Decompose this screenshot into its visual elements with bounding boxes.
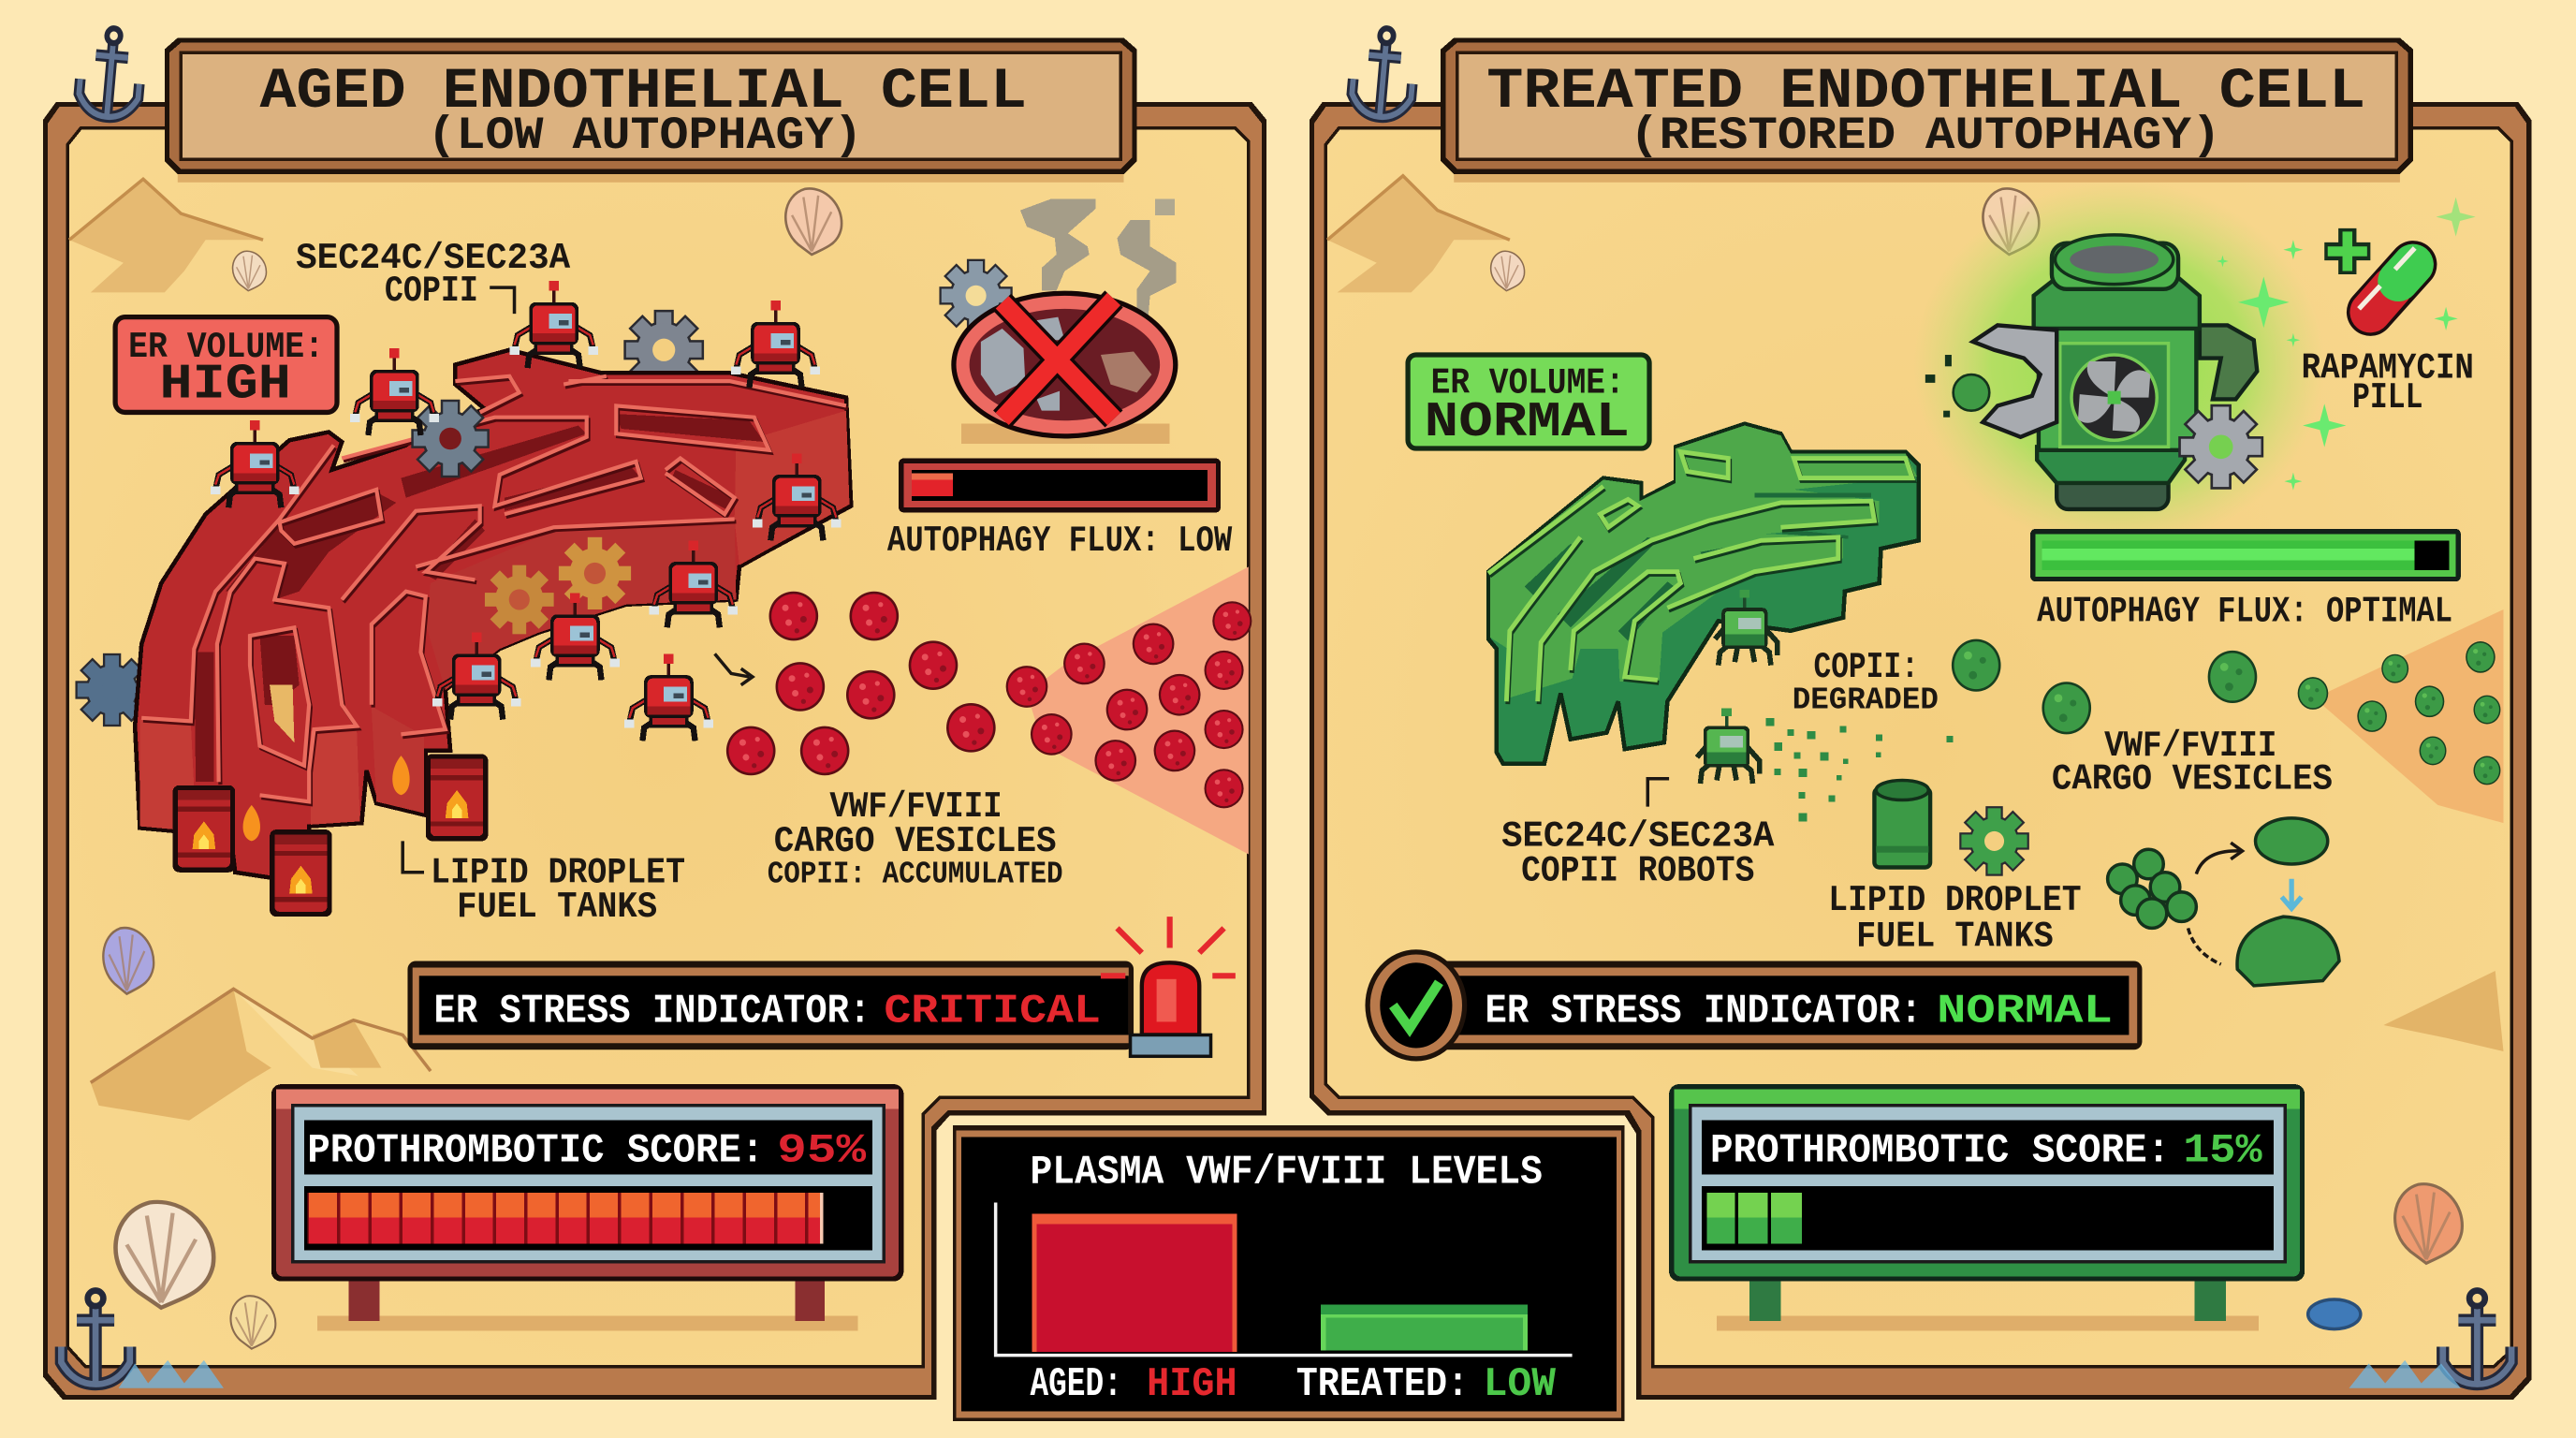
chart label: treated low: TREATED:: [1296, 1361, 1469, 1408]
score bar 95%: [307, 1193, 823, 1243]
ER walls: [139, 411, 849, 829]
bar: treated low: [1321, 1304, 1528, 1350]
label: ER volume normal: [1408, 355, 1649, 450]
anchor: bottom left: [61, 1291, 130, 1385]
icon: recycling cycle: [2108, 818, 2339, 986]
ER stress indicator: normal: ER STRESS INDICATOR:: [1486, 988, 1922, 1034]
ER structure: green: [1488, 424, 1919, 764]
header plaque: treated: (RESTORED AUTOPHAGY): [1630, 110, 2221, 162]
label: ER volume high: HIGH: [160, 357, 291, 413]
ER top surface: [1490, 425, 1917, 698]
label: autophagy flux low: AUTOPHAGY FLUX: LOW: [887, 521, 1233, 562]
flames on ER: [243, 756, 410, 841]
label: cargo vesicles: [768, 786, 1063, 892]
board legs treated: [1717, 1282, 2259, 1330]
label: COPII degraded: [1793, 647, 1939, 718]
panel: aged endothelial cell: [43, 26, 1266, 1400]
panel: plasma VWF/FVIII levels: [953, 1125, 1625, 1421]
label: lipid droplet fuel tanks: FUEL TANKS: [457, 887, 657, 928]
robots: green COPII intact: [1715, 590, 1778, 666]
panel frame: aged: [43, 102, 1266, 1400]
sand dune: lower right: [2383, 971, 2503, 1051]
label: green cargo vesicles: [2052, 726, 2333, 800]
label: rapamycin pill: RAPAMYCIN: [2302, 348, 2474, 389]
icon: green fuel tank: [1874, 780, 1930, 867]
label: lipid droplet fuel tanks: [402, 841, 685, 928]
icon: autophagy machine: [1925, 235, 2261, 509]
label: cargo vesicles: VWF/FVIII: [829, 786, 1003, 828]
board frame: [271, 1084, 903, 1282]
vesicles: green cargo: [1952, 639, 2500, 785]
label: SEC24C/SEC23A COPII robots: [1501, 779, 1775, 892]
icon: rapamycin pill: [2324, 228, 2415, 312]
label: SEC24C/SEC23A COPII: SEC24C/SEC23A: [296, 238, 571, 279]
ER lumen: [194, 414, 764, 782]
ER stress indicator: normal: [1365, 949, 2142, 1062]
prothrombotic score board: treated: [1669, 1084, 2305, 1330]
label: ER volume high: [115, 317, 337, 413]
ER stress indicator: critical: CRITICAL: [884, 988, 1101, 1034]
label: green lipid droplet: FUEL TANKS: [1856, 917, 2054, 958]
label: ER volume normal: NORMAL: [1425, 394, 1630, 450]
label: ER volume normal: ER VOLUME:: [1431, 362, 1625, 404]
ER stress indicator: critical: [407, 961, 1134, 1049]
label: green cargo vesicles: CARGO VESICLES: [2052, 758, 2333, 800]
label: rapamycin pill: PILL: [2352, 377, 2423, 418]
particles: degraded COPII: [1766, 718, 1954, 821]
gear: gray top: [626, 312, 702, 388]
label: rapamycin pill: [2302, 348, 2474, 418]
chart title: PLASMA VWF/FVIII LEVELS: [1031, 1149, 1543, 1196]
shell: small yellow: [230, 1296, 275, 1349]
label: SEC24C/SEC23A COPII robots: COPII ROBOTS: [1521, 851, 1754, 892]
label: cargo vesicles: CARGO VESICLES: [774, 821, 1057, 862]
sand dune: bottom left: [91, 989, 431, 1121]
label: cargo vesicles: COPII: ACCUMULATED: [768, 857, 1063, 892]
label: COPII degraded: DEGRADED: [1793, 682, 1939, 718]
autophagy flux bar: low: [899, 459, 1221, 512]
sand dune: top right panel: [1327, 176, 1510, 292]
chart frame: [953, 1125, 1625, 1421]
ER dark channels: [1525, 492, 1871, 640]
lipid droplet fuel tanks: red: [173, 754, 488, 917]
prothrombotic score board: aged: [271, 1084, 903, 1330]
glow: autophagy machine: [1914, 181, 2324, 549]
shell: small treated: [1491, 251, 1525, 291]
chart label: aged high: HIGH: [1147, 1361, 1237, 1408]
label: lipid droplet fuel tanks: LIPID DROPLET: [431, 852, 685, 893]
shell: small cream: [233, 251, 266, 291]
board frame treated: [1669, 1084, 2305, 1282]
wedge: treated release: [2315, 609, 2503, 823]
label: green cargo vesicles: VWF/FVIII: [2104, 726, 2276, 767]
autophagy flux bar: optimal: [2030, 529, 2461, 581]
shell: large cream: [115, 1202, 213, 1308]
robots: red COPII: [211, 281, 842, 741]
header plaque: treated: [1441, 37, 2413, 183]
waves: bottom left: [119, 1360, 224, 1388]
label: SEC24C/SEC23A COPII: [296, 238, 571, 314]
sand dune: top left: [69, 179, 263, 292]
chart label: treated low: LOW: [1484, 1361, 1557, 1408]
anchor: bottom right: [2443, 1291, 2511, 1385]
panel frame: treated: [1310, 102, 2531, 1400]
label: SEC24C/SEC23A COPII robots: SEC24C/SEC23A: [1501, 816, 1775, 858]
prothrombotic score board: aged: 95%: [777, 1128, 867, 1175]
header plaque: aged: (LOW AUTOPHAGY): [428, 110, 863, 162]
chart label: aged high: AGED:: [1031, 1361, 1122, 1408]
shell: pink: [785, 188, 842, 255]
header plaque: aged: AGED ENDOTHELIAL CELL: [260, 60, 1027, 125]
panel: treated endothelial cell: [1310, 26, 2531, 1400]
shell: blue: [2308, 1299, 2361, 1329]
gear: orange: [485, 565, 554, 634]
shell: purple: [103, 928, 154, 994]
label: green lipid droplet: [1828, 880, 2082, 958]
board legs: [317, 1282, 857, 1330]
label: ER volume high: ER VOLUME:: [128, 327, 324, 368]
chart label: aged high: [1031, 1361, 1237, 1408]
chart axes: [996, 1202, 1573, 1356]
gear: blue behind ER: [78, 655, 146, 725]
sparkles: [2217, 198, 2476, 491]
gear: gray center: [414, 402, 487, 476]
ER structure: red: [135, 350, 851, 884]
vesicles: red cargo: [726, 592, 1251, 808]
jaw claw: [1973, 325, 2056, 437]
label: green lipid droplet: LIPID DROPLET: [1828, 880, 2082, 921]
waves: bottom right: [2349, 1360, 2461, 1388]
anchor: top left: [77, 26, 144, 120]
icon: green gear: [1961, 808, 2027, 874]
shell: salmon: [2395, 1184, 2462, 1263]
ER stress indicator: normal: NORMAL: [1937, 988, 2113, 1034]
gear: orange second: [559, 537, 631, 609]
shell: pink treated: [1983, 188, 2039, 255]
score text treated: PROTHROMBOTIC SCORE:: [1710, 1128, 2170, 1175]
prothrombotic score board: treated: 15%: [2183, 1128, 2262, 1175]
score text: PROTHROMBOTIC SCORE:: [307, 1128, 764, 1175]
score bar 15%: [1706, 1193, 1802, 1243]
icon: broken autophagosome: [942, 198, 1178, 444]
arrow: vesicle direction: [715, 653, 753, 685]
icon: check mark: [1393, 982, 1439, 1028]
label: SEC24C/SEC23A COPII: COPII: [385, 271, 478, 312]
icon: siren: [1101, 917, 1236, 1056]
robot: green disintegrating: [1697, 708, 1760, 784]
ER stress indicator: critical: ER STRESS INDICATOR:: [434, 988, 871, 1034]
header plaque: treated: TREATED ENDOTHELIAL CELL: [1486, 60, 2365, 125]
bar: aged high: [1032, 1214, 1237, 1352]
header plaque: aged: [165, 37, 1137, 183]
label: COPII degraded: COPII:: [1814, 647, 1919, 688]
anchor: top right panel: [1350, 26, 1417, 120]
wedge: bloodstream release: [1027, 566, 1249, 854]
label: autophagy flux optimal: AUTOPHAGY FLUX: OPTIMAL: [2037, 591, 2452, 632]
